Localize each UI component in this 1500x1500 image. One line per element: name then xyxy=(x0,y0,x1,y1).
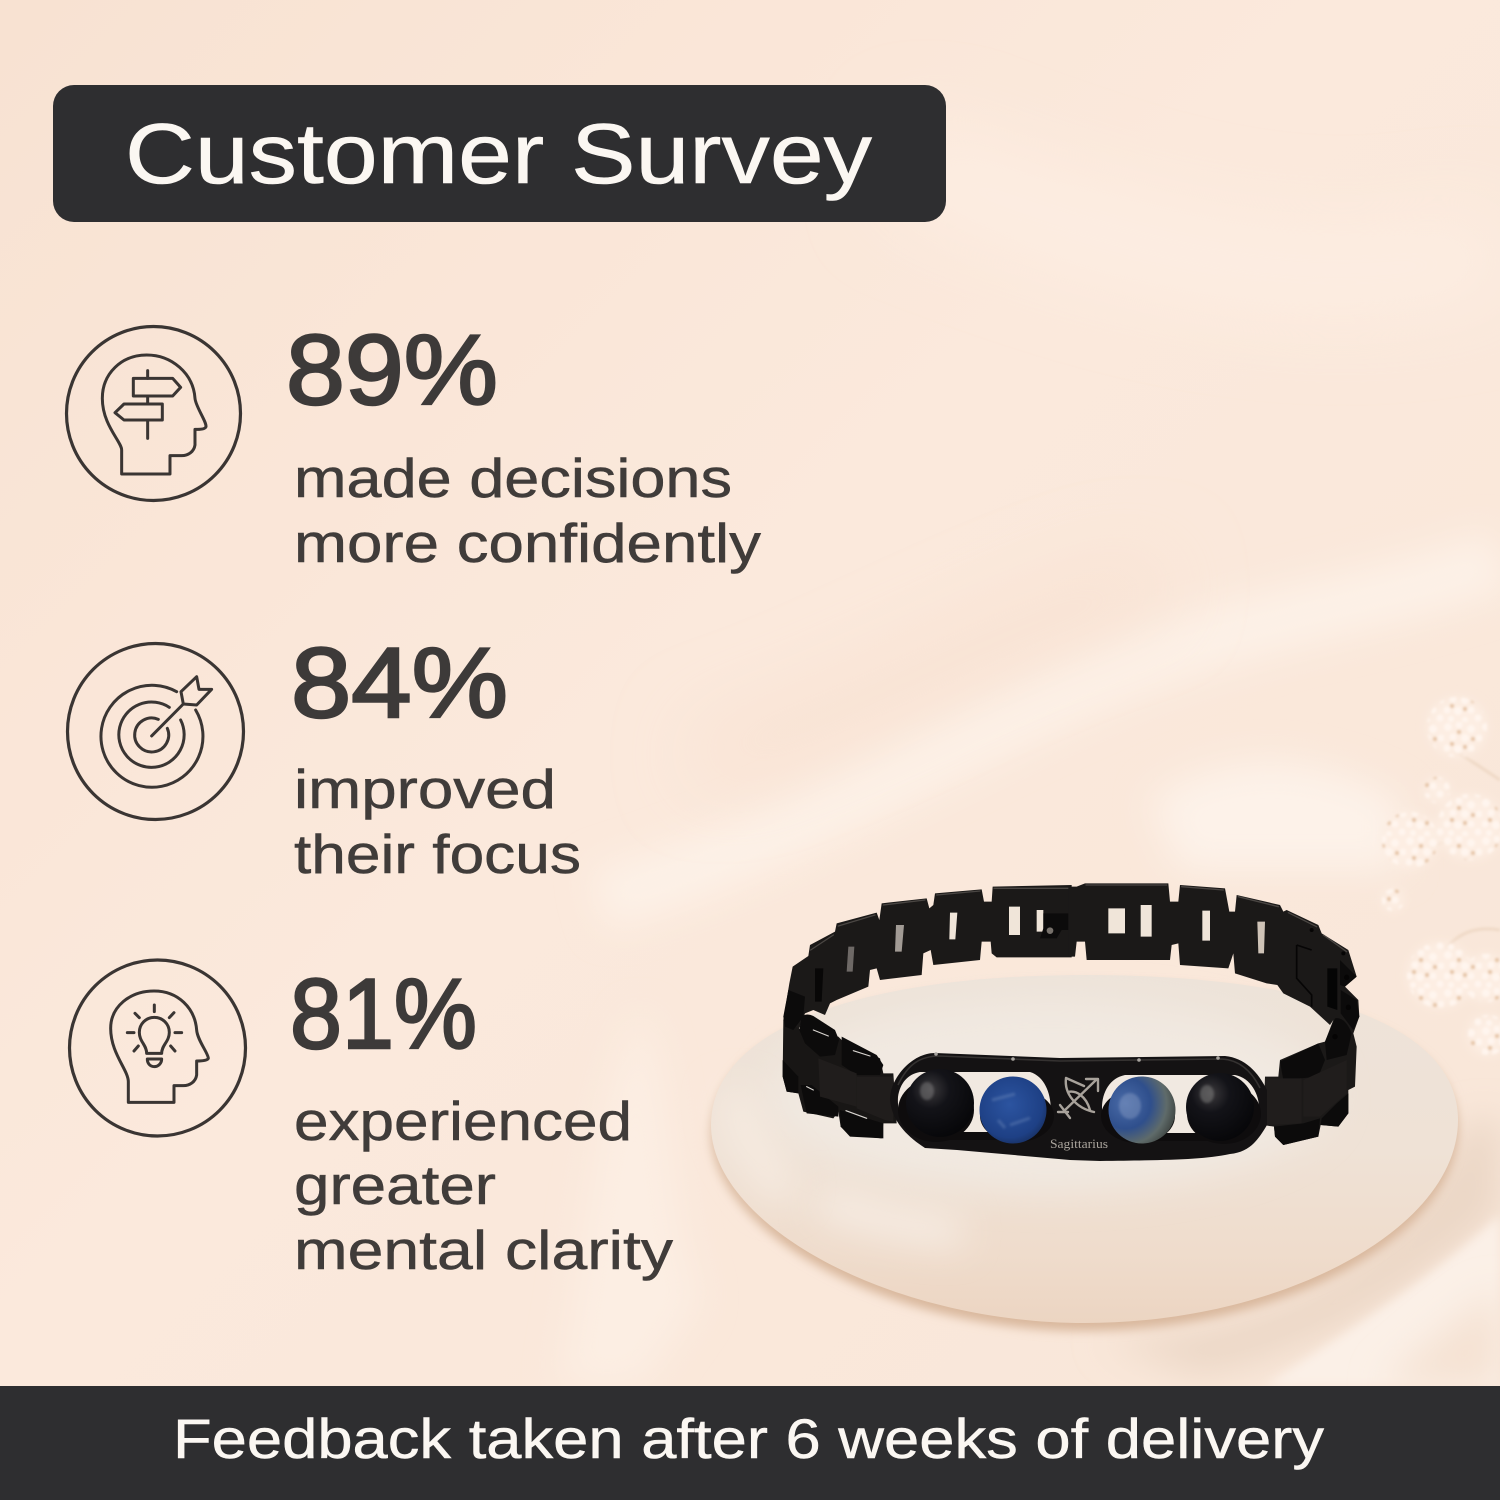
bead: black onyx right xyxy=(1186,1073,1254,1141)
plate rivets xyxy=(934,1052,1220,1062)
stat value: 81% xyxy=(290,958,477,1069)
plate rim highlight xyxy=(898,1056,1260,1088)
stat description: greater xyxy=(294,1154,496,1216)
icon: head with light bulb xyxy=(70,960,246,1136)
stat 1: decisions xyxy=(66,314,762,574)
decorative dried flowers xyxy=(1382,697,1500,1055)
stat description: experienced xyxy=(294,1090,632,1152)
bead: black onyx xyxy=(906,1069,974,1137)
bead: lapis with grey xyxy=(1108,1076,1176,1144)
right half links xyxy=(1068,883,1359,1145)
sagittarius symbol xyxy=(1058,1078,1098,1118)
stat description: mental clarity xyxy=(294,1219,674,1281)
stat value: 84% xyxy=(291,627,508,738)
center plate with bead windows xyxy=(890,1053,1267,1161)
stone pedestal xyxy=(711,975,1458,1331)
stat 2: focus xyxy=(68,627,581,885)
title pill xyxy=(53,85,946,222)
bracelet xyxy=(783,883,1359,1161)
bead shadow collars xyxy=(898,1078,1261,1144)
stat description: made decisions xyxy=(294,447,732,509)
icon: head with signpost xyxy=(66,326,240,500)
stat description: improved xyxy=(294,758,556,820)
footer text: Feedback taken after 6 weeks of delivery xyxy=(173,1407,1324,1470)
icon: target with arrow xyxy=(68,644,244,820)
left half links xyxy=(783,885,1072,1138)
footer bar xyxy=(0,1386,1500,1500)
stat 3: clarity xyxy=(70,958,674,1281)
engraved name: Sagittarius xyxy=(1050,1136,1108,1151)
stat description: their focus xyxy=(294,823,581,885)
stat description: more confidently xyxy=(294,512,762,574)
bead: lapis xyxy=(980,1076,1046,1144)
stat value: 89% xyxy=(286,314,498,425)
title text: Customer Survey xyxy=(125,107,873,202)
